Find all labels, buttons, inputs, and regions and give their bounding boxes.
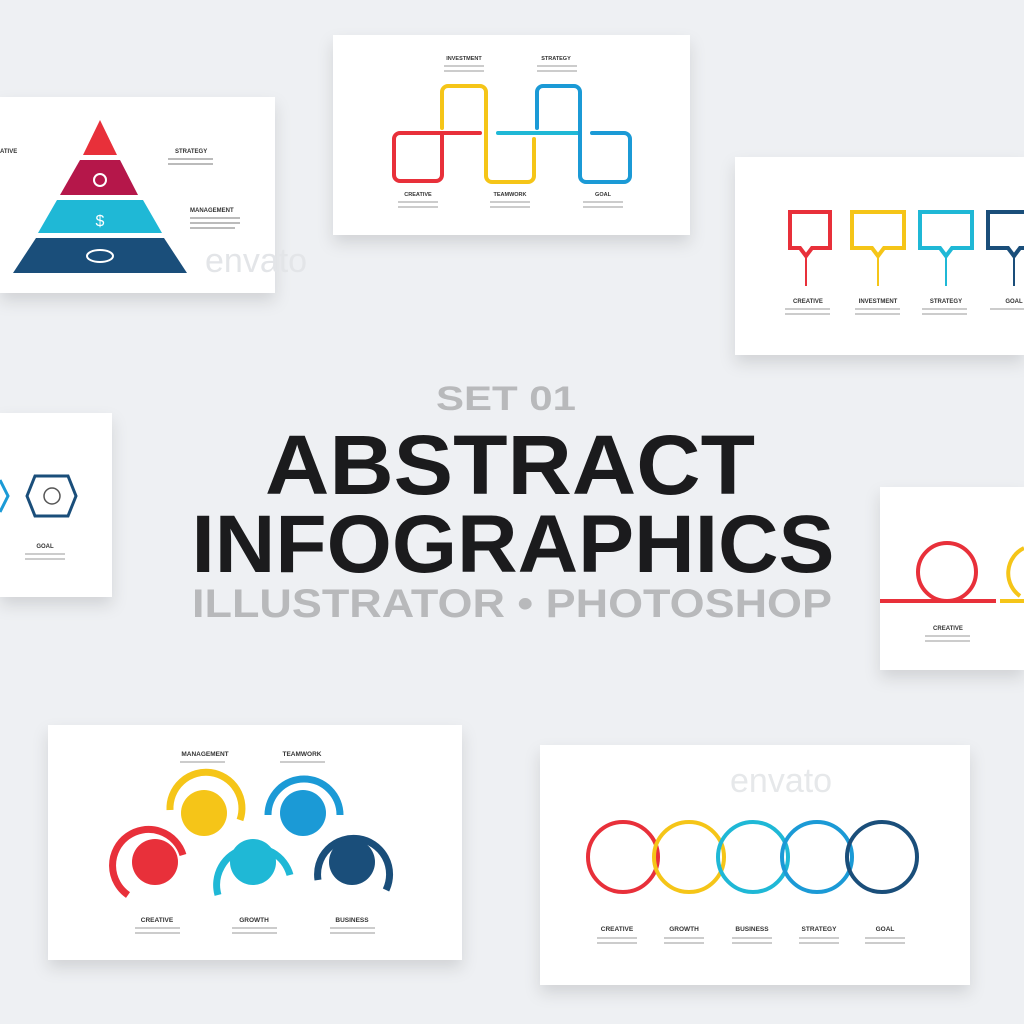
panel: arrow boxes card: INVESTMENT	[859, 299, 898, 305]
panel: step path card	[333, 35, 690, 235]
title: ABSTRACT	[265, 418, 755, 512]
panel: arrow boxes card	[735, 157, 1024, 355]
watermark: envato	[730, 762, 832, 800]
panel: arrow boxes card: GOAL	[1005, 299, 1023, 305]
title: ILLUSTRATOR • PHOTOSHOP	[192, 582, 832, 626]
panel: arrow boxes card: CREATIVE	[793, 299, 823, 305]
pyramid: $	[96, 213, 105, 230]
panel: arcs card: CREATIVE	[141, 917, 174, 924]
title	[192, 380, 834, 626]
panel: circles chain card	[540, 745, 970, 985]
watermark: envato	[205, 242, 307, 280]
panel: circles chain card: STRATEGY	[802, 926, 837, 933]
labels	[0, 149, 240, 229]
pyramid	[13, 120, 187, 273]
panel: circles chain card: CREATIVE	[601, 926, 634, 933]
panel: step path card: INVESTMENT	[446, 56, 482, 62]
panel: circles chain card: BUSINESS	[735, 926, 769, 933]
panel: arcs card: TEAMWORK	[282, 751, 322, 758]
panel: step path card: GOAL	[595, 192, 612, 198]
panel: circles chain card: GOAL	[876, 926, 894, 933]
panel: step path card: CREATIVE	[404, 192, 432, 198]
panel: hexagon card: GOAL	[36, 544, 54, 550]
title: INFOGRAPHICS	[192, 499, 834, 590]
panel: circle loop card: CREATIVE	[933, 626, 963, 632]
labels: ATIVE	[0, 149, 17, 155]
panel: arcs card: BUSINESS	[335, 917, 369, 924]
panel: hexagon card	[0, 413, 112, 597]
panel: circle loop card	[880, 487, 1024, 670]
panel: arrow boxes card: STRATEGY	[930, 299, 962, 305]
panel: arcs card: MANAGEMENT	[181, 751, 229, 758]
title: SET 01	[436, 380, 576, 418]
panel: pyramid card	[0, 97, 275, 293]
panel: arcs card	[48, 725, 462, 960]
panel: circles chain card: GROWTH	[669, 926, 699, 933]
panel: step path card: TEAMWORK	[494, 192, 527, 198]
panel: step path card: STRATEGY	[541, 56, 571, 62]
labels: MANAGEMENT	[190, 208, 234, 214]
panel: arcs card: GROWTH	[239, 917, 269, 924]
labels: STRATEGY	[175, 149, 207, 155]
